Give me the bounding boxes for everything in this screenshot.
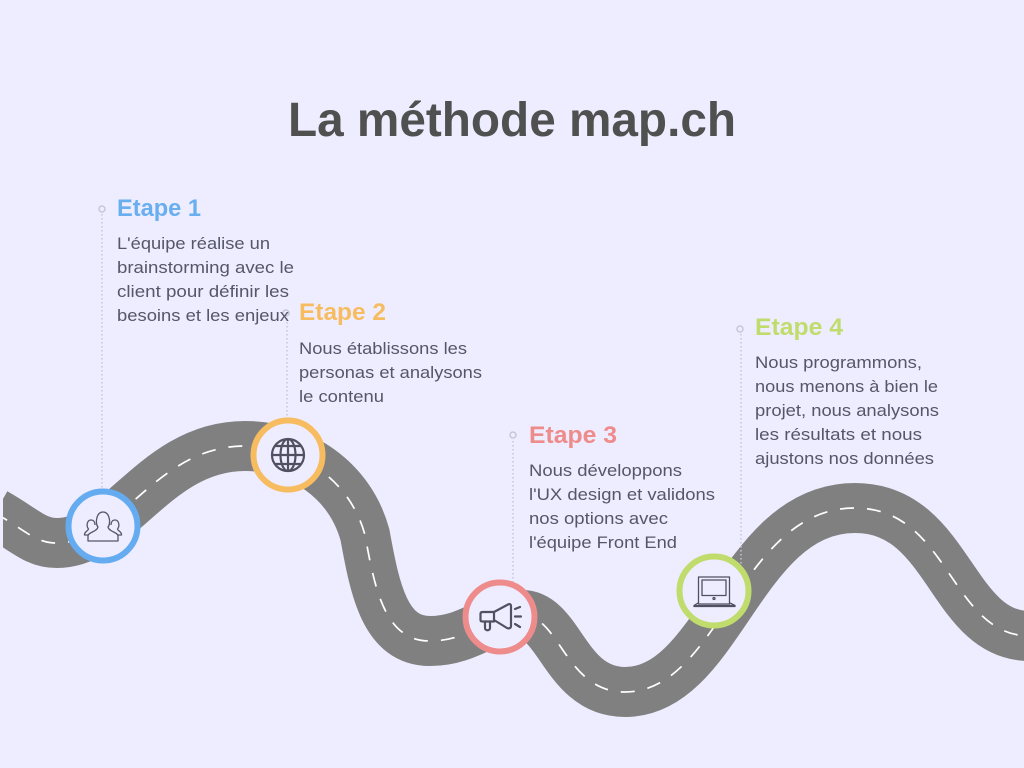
text: etape 3 description: Nous développons [529, 461, 682, 480]
icon: laptop marker [680, 556, 748, 626]
dotted connector lines [99, 206, 743, 582]
text: etape 1 description: besoins et les enjeux [117, 306, 290, 325]
heading: etape 2: Etape 2 [299, 299, 386, 326]
text: etape 3 description [529, 461, 715, 552]
text: etape 1 description: L'équipe réalise un [117, 234, 270, 253]
text: etape 2 description: Nous établissons les [299, 339, 467, 358]
icon: megaphone marker [466, 582, 534, 652]
text: etape 2 description: personas et analysons [299, 363, 482, 382]
text: etape 2 description: le contenu [299, 387, 384, 406]
text: etape 3 description: l'équipe Front End [529, 533, 677, 552]
icon: globe marker [254, 420, 322, 490]
text: etape 3 description: nos options avec [529, 509, 669, 528]
text: etape 3 description: l'UX design et validons [529, 485, 715, 504]
text: etape 1 description: brainstorming avec le [117, 258, 294, 277]
text: etape 2 description [299, 339, 482, 406]
panel: etape 3 [529, 422, 715, 552]
title: La méthode map.ch [288, 94, 736, 147]
heading: etape 1: Etape 1 [117, 195, 201, 222]
winding road [0, 446, 1024, 692]
text: etape 1 description [117, 234, 294, 325]
text: etape 4 description: les résultats et nous [755, 425, 922, 444]
heading: etape 4: Etape 4 [755, 314, 843, 341]
panel: etape 4 [755, 314, 939, 468]
heading: etape 3: Etape 3 [529, 422, 617, 449]
text: etape 4 description: nous menons à bien le [755, 377, 938, 396]
text: etape 4 description [755, 353, 939, 468]
text: etape 4 description: Nous programmons, [755, 353, 922, 372]
icon: team marker [68, 492, 138, 560]
text: etape 4 description: projet, nous analysons [755, 401, 939, 420]
panel: etape 2 [299, 299, 482, 406]
panel: etape 1 [117, 195, 294, 325]
text: etape 4 description: ajustons nos données [755, 449, 934, 468]
text: etape 1 description: client pour définir les [117, 282, 289, 301]
